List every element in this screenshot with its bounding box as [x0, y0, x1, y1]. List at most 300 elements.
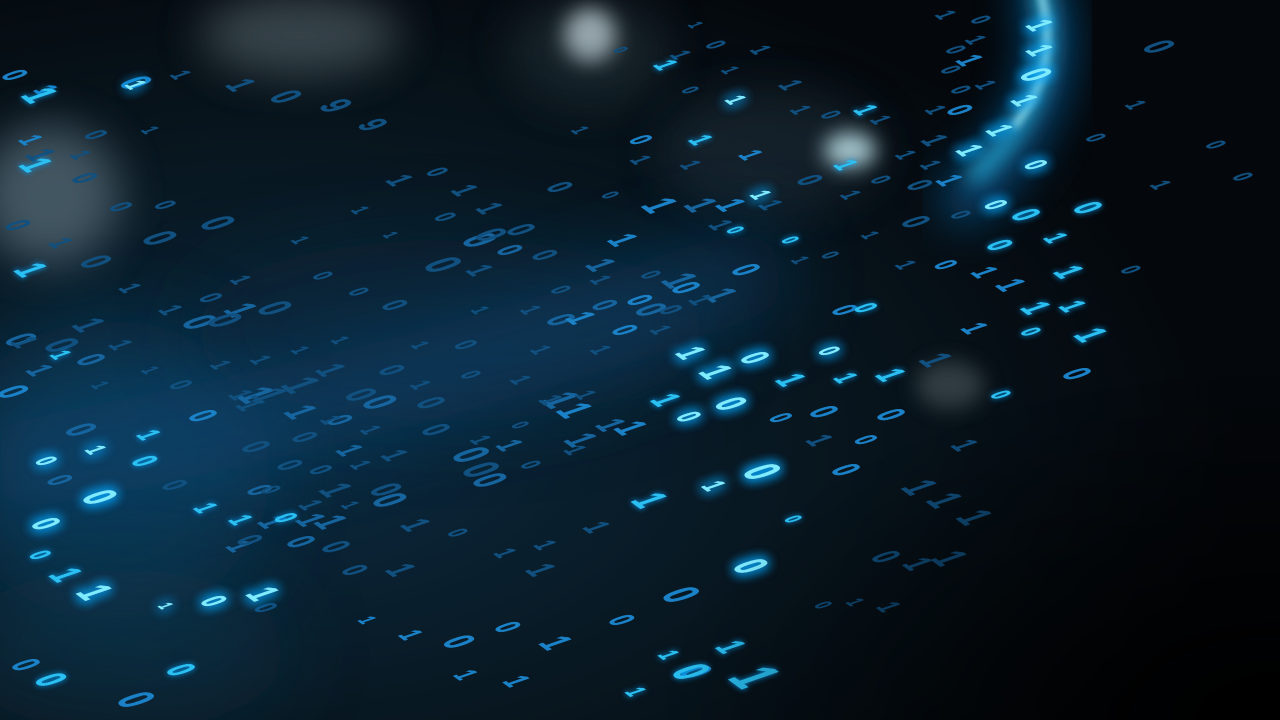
dense band digits: 1: [328, 441, 372, 459]
hot glowing binary digits: 1: [235, 583, 289, 605]
dim binary digits: 0: [440, 526, 474, 540]
dense band digits: 0: [38, 471, 82, 489]
dim binary digits: 1: [443, 181, 487, 199]
hot glowing binary digits: 1: [118, 78, 152, 92]
dim binary digits: 1: [863, 113, 897, 127]
dense band digits: 0: [439, 442, 501, 468]
mid blue binary digits: 1: [603, 417, 657, 439]
dim binary digits: 1: [673, 158, 707, 172]
mid blue binary digits: 0: [866, 405, 914, 425]
mid blue binary digits: 0: [649, 582, 711, 608]
dim binary digits: 1: [308, 479, 362, 501]
dim binary digits: 0: [898, 176, 942, 194]
dim binary digits: 0: [258, 86, 312, 108]
dim binary digits: 1: [568, 388, 602, 402]
dense band digits: 1: [673, 194, 727, 216]
bright cyan binary digits: 1: [646, 57, 684, 73]
dim binary digits: 1: [1118, 98, 1152, 112]
dim binary digits: 0: [333, 561, 377, 579]
dense band digits: 1: [576, 255, 624, 275]
dense band digits: 1: [218, 537, 262, 555]
bright cyan binary digits: 0: [776, 234, 804, 246]
dim binary digits: 0: [305, 269, 339, 283]
dim binary digits: 1: [286, 344, 314, 356]
dim binary digits: 1: [487, 545, 523, 561]
dim binary digits: 0: [246, 600, 284, 616]
dim binary digits: 0: [496, 220, 544, 240]
dim binary digits: 9: [348, 115, 396, 135]
dim binary digits: 1: [61, 314, 115, 336]
dim binary digits: 1: [890, 475, 950, 499]
dim binary digits: 0: [1113, 263, 1147, 277]
dim binary digits: 0: [188, 211, 248, 235]
mid blue binary digits: 0: [621, 132, 659, 148]
dim binary digits: 1: [527, 537, 563, 553]
dim binary digits: 0: [506, 419, 534, 431]
mid blue binary digits: 1: [391, 627, 429, 643]
mid blue binary digits: 1: [26, 82, 64, 98]
dim binary digits: 1: [458, 261, 502, 279]
mid blue binary digits: 0: [821, 460, 869, 480]
dim binary digits: 1: [221, 387, 259, 403]
dim binary digits: 0: [513, 458, 547, 472]
dim binary digits: 0: [963, 13, 997, 27]
bright cyan binary digits: 0: [266, 510, 304, 526]
mid blue binary digits: 0: [1, 655, 49, 675]
dim binary digits: 1: [313, 413, 347, 427]
mid blue binary digits: 0: [108, 72, 162, 94]
dim binary digits: 0: [543, 283, 577, 297]
dense band digits: 0: [623, 299, 677, 321]
dim binary digits: 1: [403, 378, 437, 392]
dim binary digits: 1: [643, 323, 677, 337]
dim binary digits: 0: [373, 296, 417, 314]
dim binary digits: 1: [945, 505, 1005, 529]
dim binary digits: 1: [918, 103, 952, 117]
dim binary digits: 1: [915, 488, 975, 512]
dense band digits: 1: [488, 436, 532, 454]
mid blue binary digits: 0: [668, 661, 722, 683]
dim binary digits: 0: [449, 457, 511, 483]
hot glowing binary digits: 1: [1018, 16, 1062, 34]
dim binary digits: 1: [373, 446, 417, 464]
dense band digits: 0: [488, 241, 532, 259]
dim binary digits: 0: [933, 63, 967, 77]
mid blue binary digits: 1: [963, 263, 1007, 281]
mid blue binary digits: 1: [630, 193, 690, 217]
dim binary digits: 1: [86, 379, 114, 391]
bright cyan binary digits: 0: [846, 300, 884, 316]
bright cyan binary digits: 0: [23, 669, 77, 691]
dim binary digits: 1: [751, 197, 789, 213]
dim binary digits: 1: [786, 254, 814, 266]
hot glowing binary digits: 1: [1018, 41, 1062, 59]
mid blue binary digits: 1: [986, 275, 1034, 295]
dim binary digits: 1: [893, 554, 941, 574]
dim binary digits: 1: [463, 433, 497, 447]
hot glowing binary digits: 1: [743, 188, 777, 202]
hot glowing binary digits: 0: [976, 197, 1014, 213]
mid blue binary digits: 0: [823, 301, 867, 319]
dim binary digits: 0: [245, 296, 305, 320]
dim binary digits: 0: [453, 368, 487, 382]
dim binary digits: 1: [136, 124, 164, 136]
dense band digits: 1: [303, 511, 357, 533]
dim binary digits: 1: [343, 458, 377, 472]
dense band digits: 0: [276, 532, 324, 552]
dim binary digits: 0: [698, 38, 732, 52]
hot glowing binary digits: 1: [1003, 91, 1047, 109]
dim binary digits: 1: [203, 358, 237, 372]
dim binary digits: 0: [253, 483, 287, 497]
dim binary digits: 0: [861, 547, 909, 567]
dim binary digits: 1: [908, 349, 962, 371]
bright cyan binary digits: 1: [129, 427, 167, 443]
mid blue binary digits: 1: [446, 667, 484, 683]
dim binary digits: 0: [943, 83, 977, 97]
dim binary digits: 1: [888, 148, 922, 162]
hot glowing binary digits: 0: [192, 592, 236, 610]
bright cyan binary digits: 0: [1013, 325, 1047, 339]
dim binary digits: 1: [346, 204, 374, 216]
hot glowing binary digits: 1: [978, 121, 1022, 139]
dim binary digits: 1: [681, 292, 719, 308]
bright cyan binary digits: 0: [659, 659, 721, 685]
bright cyan binary digits: 0: [978, 236, 1022, 254]
dim binary digits: 0: [101, 199, 139, 215]
dim binary digits: 0: [161, 377, 199, 393]
dim binary digits: 0: [809, 599, 837, 611]
bright cyan binary digits: 0: [1001, 205, 1049, 225]
dim binary digits: 0: [153, 476, 197, 494]
hot glowing binary digits: 0: [703, 393, 757, 415]
dim binary digits: 0: [813, 108, 847, 122]
mid blue binary digits: 0: [618, 291, 662, 309]
blue density band behind the digits: [0, 260, 780, 470]
dim binary digits: 0: [228, 531, 272, 549]
dense band digits: 0: [583, 296, 627, 314]
mid blue binary digits: 0: [761, 410, 799, 426]
bright cyan binary digits: 0: [779, 513, 807, 525]
hot glowing binary digits: 0: [28, 453, 64, 469]
dim binary digits: 0: [943, 208, 977, 222]
dim binary digits: 1: [163, 68, 197, 82]
dim binary digits: 1: [968, 78, 1002, 92]
dim binary digits: 1: [63, 148, 97, 162]
dim binary digits: 1: [716, 64, 744, 76]
dim binary digits: 0: [191, 290, 229, 306]
bright cyan binary digits: 0: [1063, 198, 1111, 218]
dim binary digits: 0: [891, 212, 939, 232]
dim binary digits: 0: [538, 178, 582, 196]
dense band digits: [0, 194, 747, 555]
dense band digits: 1: [693, 284, 747, 306]
mid blue binary digits: 1: [11, 132, 49, 148]
dim binary digits: 0: [1225, 170, 1259, 184]
dim binary digits: 1: [623, 153, 657, 167]
dim binary digits: 1: [523, 343, 557, 357]
dim binary digits: 0: [341, 285, 375, 299]
dim binary digits: 0: [283, 428, 327, 446]
dim binary digits: 0: [358, 479, 412, 501]
dense band digits: 0: [536, 310, 584, 330]
dim binary digits: 0: [863, 173, 897, 187]
bright cyan binary digits: 1: [766, 370, 814, 390]
dense band digits: 1: [224, 382, 286, 408]
bright cyan binary digits: 1: [620, 488, 680, 512]
dim binary digits: 0: [523, 246, 567, 264]
dim binary digits: 1: [856, 229, 884, 241]
dim binary digits: 0: [147, 197, 183, 213]
dim binary digits: 0: [419, 164, 455, 180]
dim binary digits: 1: [240, 383, 300, 407]
dim binary digits: 1: [466, 304, 494, 316]
dim binary digits: 0: [406, 393, 454, 413]
dim binary digits: 1: [913, 158, 947, 172]
dim binary digits: 0: [370, 361, 414, 379]
dense band digits: 1: [553, 429, 607, 451]
dim binary digits: 1: [378, 230, 402, 240]
dim binary digits: 1: [513, 303, 547, 317]
dim binary digits: 1: [3, 333, 47, 351]
bright cyan binary digits: 1: [641, 390, 689, 410]
dense band digits: 1: [213, 299, 267, 321]
bright cyan binary digits: 0: [156, 660, 204, 680]
dim binary digits: 1: [928, 8, 962, 22]
dim binary digits: 0: [268, 456, 312, 474]
hot glowing binary digits: 0: [730, 459, 792, 485]
dense band digits: 1: [529, 387, 591, 413]
dim binary digits: 1: [798, 431, 842, 449]
dim binary digits: 1: [291, 497, 329, 513]
dim binary digits: 0: [311, 537, 359, 557]
bright cyan binary digits: 1: [3, 259, 57, 281]
bright cyan binary digits: 1: [706, 637, 754, 657]
dim binary digits: 1: [112, 280, 148, 296]
dim binary digits: 1: [269, 372, 331, 398]
bright cyan binary digits: 1: [186, 500, 224, 516]
dim binary digits: 1: [575, 518, 619, 536]
bright cyan binary digits: 1: [1044, 262, 1092, 282]
dim binary digits: 1: [306, 360, 354, 380]
dim binary digits: 1: [516, 560, 564, 580]
hot glowing binary digits: 0: [811, 343, 847, 359]
bright cyan binary digits: 1: [1051, 297, 1095, 315]
dim binary digits: 1: [869, 599, 907, 615]
dim binary digits: 1: [833, 188, 867, 202]
dim binary digits: 1: [376, 560, 424, 580]
glowing arc: [965, 0, 1049, 200]
hot glowing binary digits: [21, 16, 1062, 611]
dense band digits: 0: [318, 411, 362, 429]
dim binary digits: 0: [938, 43, 972, 57]
dense band digits: 1: [248, 512, 296, 532]
mid blue binary digits: 1: [495, 672, 539, 690]
dim binary digits: 0: [195, 308, 255, 332]
dim binary digits: 1: [701, 217, 739, 233]
dim binary digits: 0: [633, 268, 667, 282]
dim binary digits: 0: [427, 209, 463, 225]
dim binary digits: 1: [920, 546, 980, 570]
dim binary digits: 1: [336, 499, 364, 511]
bright cyan binary digits: 0: [721, 224, 749, 236]
mid blue binary digits: 0: [1052, 364, 1100, 384]
mid blue binary digits: 0: [486, 618, 530, 636]
dim binary digits: 0: [788, 171, 832, 189]
mid blue binary digits: 0: [431, 631, 485, 653]
hot glowing binary digits: 0: [721, 554, 781, 578]
dim binary digits: 0: [301, 462, 339, 478]
bright cyan binary digits: 1: [651, 648, 685, 662]
dense band digits: 0: [450, 228, 510, 252]
dense band digits: 1: [650, 268, 710, 292]
hot glowing binary digits: 1: [718, 93, 752, 107]
dim binary digits: 1: [223, 273, 257, 287]
mid blue binary digits: 0: [846, 432, 884, 448]
dim binary digits: 0: [68, 251, 122, 273]
dense band digits: 0: [460, 468, 520, 492]
dense band digits: 0: [53, 419, 107, 441]
bright cyan binary digits: 0: [123, 452, 167, 470]
dim binary digits: 1: [406, 339, 434, 351]
dim binary digits: 1: [583, 273, 617, 287]
dim binary digits: 1: [841, 596, 869, 608]
dim binary digits: 0: [411, 420, 459, 440]
dim binary digits: 0: [130, 226, 190, 250]
hot glowing binary digits: 1: [65, 580, 125, 604]
dim binary digits: 1: [391, 515, 439, 535]
dim binary digits: 1: [888, 258, 922, 272]
dense band digits: 1: [273, 401, 327, 423]
hot glowing binary digits: 0: [668, 408, 708, 426]
dim binary digits: 1: [136, 364, 164, 376]
hot glowing binary digits: 0: [70, 485, 130, 509]
hot glowing binary digits: 1: [694, 478, 732, 494]
dim binary digits: 1: [353, 423, 387, 437]
mid blue binary digits: 1: [706, 195, 754, 215]
bright cyan binary digits: 1: [221, 512, 259, 528]
mid blue binary digits: 0: [926, 257, 964, 273]
bright cyan binary digits: 1: [714, 660, 796, 694]
dense band digits: 1: [18, 361, 62, 379]
dim binary digits: 1: [101, 337, 139, 353]
mid blue binary digits: 1: [353, 614, 381, 626]
dim binary digits: 1: [503, 373, 537, 387]
dim binary digits: 1: [1143, 178, 1177, 192]
hot glowing binary digits: 1: [948, 141, 992, 159]
dense band digits: 0: [350, 390, 410, 414]
mid blue binary digits: 0: [104, 687, 166, 713]
bright cyan binary digits: 1: [826, 157, 864, 173]
clouds of haze: [0, 0, 984, 720]
bright cyan binary digits: 1: [8, 154, 62, 176]
dim binary digits: 0: [1078, 131, 1112, 145]
dim binary digits: 1: [943, 436, 987, 454]
hot glowing binary digits: 0: [1016, 157, 1054, 173]
hot glowing binary digits: 1: [688, 361, 742, 383]
dim binary digits: 0: [446, 337, 484, 353]
dim binary digits: 0: [596, 189, 624, 201]
hot glowing binary digits: 0: [21, 514, 69, 534]
bright cyan binary digits: 1: [38, 564, 92, 586]
dim binary digits: 0: [333, 384, 387, 406]
hot glowing binary digits: 0: [1008, 64, 1062, 86]
dim binary digits: 1: [771, 77, 809, 93]
mid blue binary digits: 1: [528, 632, 582, 654]
bright cyan binary digits: 1: [681, 132, 719, 148]
dim binary digits: 1: [663, 48, 697, 62]
bright cyan binary digits: 1: [846, 102, 884, 118]
dim binary digits: 0: [231, 437, 279, 457]
mid blue binary digits: 1: [928, 171, 972, 189]
dim binary digits: 0: [1131, 36, 1185, 58]
dim binary digits: 0: [608, 45, 632, 55]
bright cyan binary digits: 0: [22, 547, 58, 563]
bright cyan binary digits: 1: [1011, 298, 1059, 318]
mid blue binary digits: 0: [938, 101, 982, 119]
dim binary digits: 0: [411, 252, 473, 278]
dense band digits: 1: [286, 510, 334, 530]
mid blue binary digits: 0: [603, 321, 647, 339]
dim binary digits: 1: [557, 442, 593, 458]
dense band digits: 0: [66, 350, 114, 370]
dim binary digits: 1: [958, 33, 992, 47]
dim binary digits: 1: [151, 302, 189, 318]
dim binary digits: 9: [308, 95, 362, 117]
mid blue binary digits: 1: [598, 230, 646, 250]
mid blue binary digits: 1: [953, 319, 997, 337]
dense band digits: 1: [586, 415, 634, 435]
bright cyan binary digits: 1: [1036, 230, 1074, 246]
dim binary digits: 1: [743, 43, 777, 57]
mid blue binary digits: 0: [661, 278, 709, 298]
bright cyan binary digits: 1: [866, 365, 914, 385]
dense band digits: 0: [170, 310, 230, 334]
dim binary digits: 1: [783, 103, 817, 117]
mid blue binary digits: 0: [721, 260, 769, 280]
dim binary digits: 1: [326, 334, 354, 346]
mid blue binary digits: 0: [600, 611, 644, 629]
dim binary digits: 1: [913, 131, 957, 149]
hot glowing binary digits: 0: [730, 348, 778, 368]
dim binary digits: 1: [286, 234, 314, 246]
dim binary digits: 0: [76, 127, 114, 143]
hot glowing binary digits: 1: [78, 443, 112, 457]
bright cyan binary digits: 0: [983, 388, 1017, 402]
dense band digits: 0: [238, 481, 282, 499]
dim binary digits: 1: [378, 171, 422, 189]
mid blue binary digits: 0: [799, 402, 847, 422]
dim binary digits: 0: [816, 249, 844, 261]
bright cyan binary digits: 1: [10, 83, 70, 107]
mid blue binary digits: 1: [948, 51, 992, 69]
hot glowing binary digits: 1: [153, 601, 177, 611]
hot glowing binary digits: 1: [666, 343, 714, 363]
dim binary digits: 1: [683, 20, 707, 30]
mid blue binary digits: 1: [556, 308, 604, 328]
mid blue binary digits: 1: [545, 398, 605, 422]
mid blue binary digits: [0, 51, 1100, 713]
dim binary digits: 1: [228, 396, 272, 414]
mid blue binary digits: 1: [731, 147, 769, 163]
bright cyan binary digits: 1: [1063, 324, 1117, 346]
mid blue binary digits: 0: [178, 406, 226, 426]
dim binary digits: 1: [566, 124, 594, 136]
bright cyan binary digits: 1: [43, 348, 77, 362]
dim binary digits: 0: [1198, 138, 1232, 152]
dim binary digits: 0: [463, 224, 517, 246]
dim binary digits: 1: [531, 392, 569, 408]
